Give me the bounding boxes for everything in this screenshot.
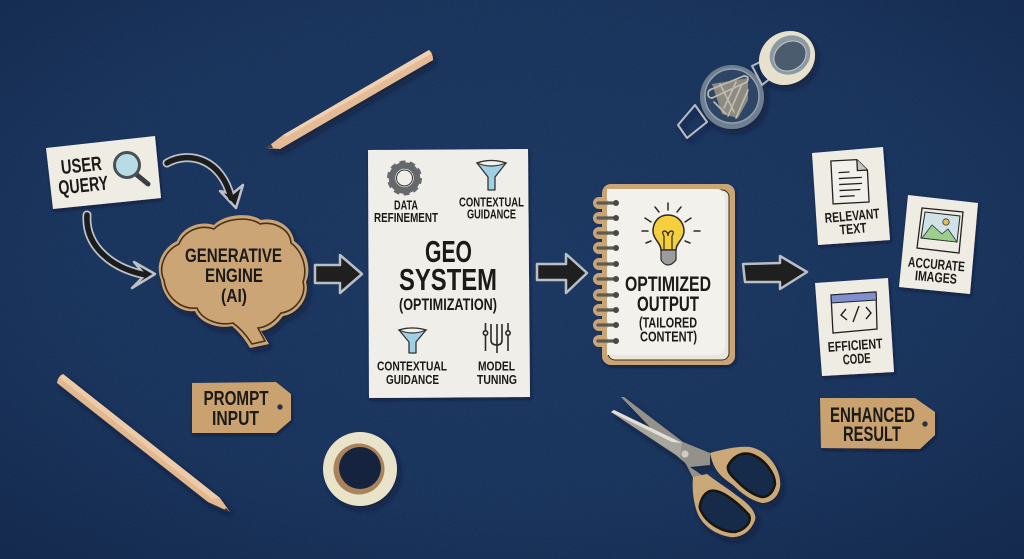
card: relevant text xyxy=(812,147,890,245)
jar lid xyxy=(748,20,826,96)
text: images: IMAGES xyxy=(914,267,958,287)
text: data refinement: DATA xyxy=(394,198,418,212)
text: contextual guidance top: GUIDANCE xyxy=(467,206,516,222)
icon: light bulb xyxy=(642,203,700,265)
text: geo: GEO xyxy=(425,234,472,269)
icon: gear xyxy=(390,163,420,193)
text: contextual guidance bottom: CONTEXTUAL xyxy=(377,358,447,374)
text: text: TEXT xyxy=(839,219,868,238)
text: (AI): (AI) xyxy=(221,286,247,306)
text: generative: GENERATIVE xyxy=(185,246,282,267)
tag: enhanced result xyxy=(820,398,935,449)
text: efficient: EFFICIENT xyxy=(827,335,883,355)
icon: funnel bottom xyxy=(399,328,426,353)
text: model tuning xyxy=(477,358,517,387)
jar latch xyxy=(678,105,707,138)
text: code: CODE xyxy=(842,350,871,367)
icon: funnel top xyxy=(477,160,506,190)
text: contextual guidance top: CONTEXTUAL xyxy=(459,194,524,210)
notebook spiral rings xyxy=(593,197,619,347)
panel: generative engine brain xyxy=(159,215,308,348)
text: contextual guidance bottom xyxy=(377,358,447,387)
text: accurate: ACCURATE xyxy=(907,254,966,274)
paperclip jar xyxy=(678,20,826,138)
panel: geo system card xyxy=(368,149,530,398)
icon: magnifying glass xyxy=(114,152,148,184)
jar body xyxy=(700,65,764,129)
text: output: OUTPUT xyxy=(637,293,699,316)
icon: tuning fork and sliders xyxy=(483,323,510,353)
pencil: top xyxy=(266,50,433,149)
text: result: RESULT xyxy=(843,423,901,446)
icon: picture frame xyxy=(917,208,963,253)
text: optimization: (OPTIMIZATION) xyxy=(399,295,497,314)
scissors blades xyxy=(621,397,710,478)
text: input: INPUT xyxy=(212,408,259,430)
arrow: query to engine left xyxy=(87,215,155,288)
tape roll xyxy=(323,432,397,506)
icon: document xyxy=(831,159,869,204)
arrow: output to results xyxy=(743,256,807,289)
text: model tuning: MODEL xyxy=(478,358,515,374)
icon: code window xyxy=(831,292,877,333)
text: query: QUERY xyxy=(57,172,110,200)
text: relevant: RELEVANT xyxy=(824,205,881,226)
text: system: SYSTEM xyxy=(399,262,497,297)
arrow: engine to geo system xyxy=(315,255,362,293)
text: tailored: (TAILORED xyxy=(639,314,697,332)
panel: notebook optimized output xyxy=(593,184,735,365)
text: model tuning: TUNING xyxy=(477,372,517,387)
text: contextual guidance bottom: GUIDANCE xyxy=(386,372,439,387)
text: content: CONTENT) xyxy=(640,328,697,346)
jar neck hinge xyxy=(752,61,772,85)
text: user: USER xyxy=(60,153,103,179)
text: engine: ENGINE xyxy=(205,266,263,287)
text: prompt: PROMPT xyxy=(204,388,268,410)
text: data refinement xyxy=(374,198,438,225)
pencil: bottom left xyxy=(57,374,230,512)
card: user query xyxy=(46,136,161,209)
text: enhanced: ENHANCED xyxy=(830,404,915,427)
text: optimized: OPTIMIZED xyxy=(625,273,711,296)
card: efficient code xyxy=(815,278,894,376)
arrow: query to engine top xyxy=(167,158,243,208)
scissors handle upper xyxy=(710,447,780,503)
scissors xyxy=(611,397,780,537)
text: data refinement: REFINEMENT xyxy=(374,210,438,225)
text: contextual guidance top xyxy=(459,194,524,222)
tag: prompt input xyxy=(192,382,291,433)
scissors handle lower xyxy=(693,474,755,537)
card: accurate images xyxy=(899,195,978,294)
paper clips xyxy=(708,76,748,118)
arrow: geo system to output xyxy=(537,254,587,293)
